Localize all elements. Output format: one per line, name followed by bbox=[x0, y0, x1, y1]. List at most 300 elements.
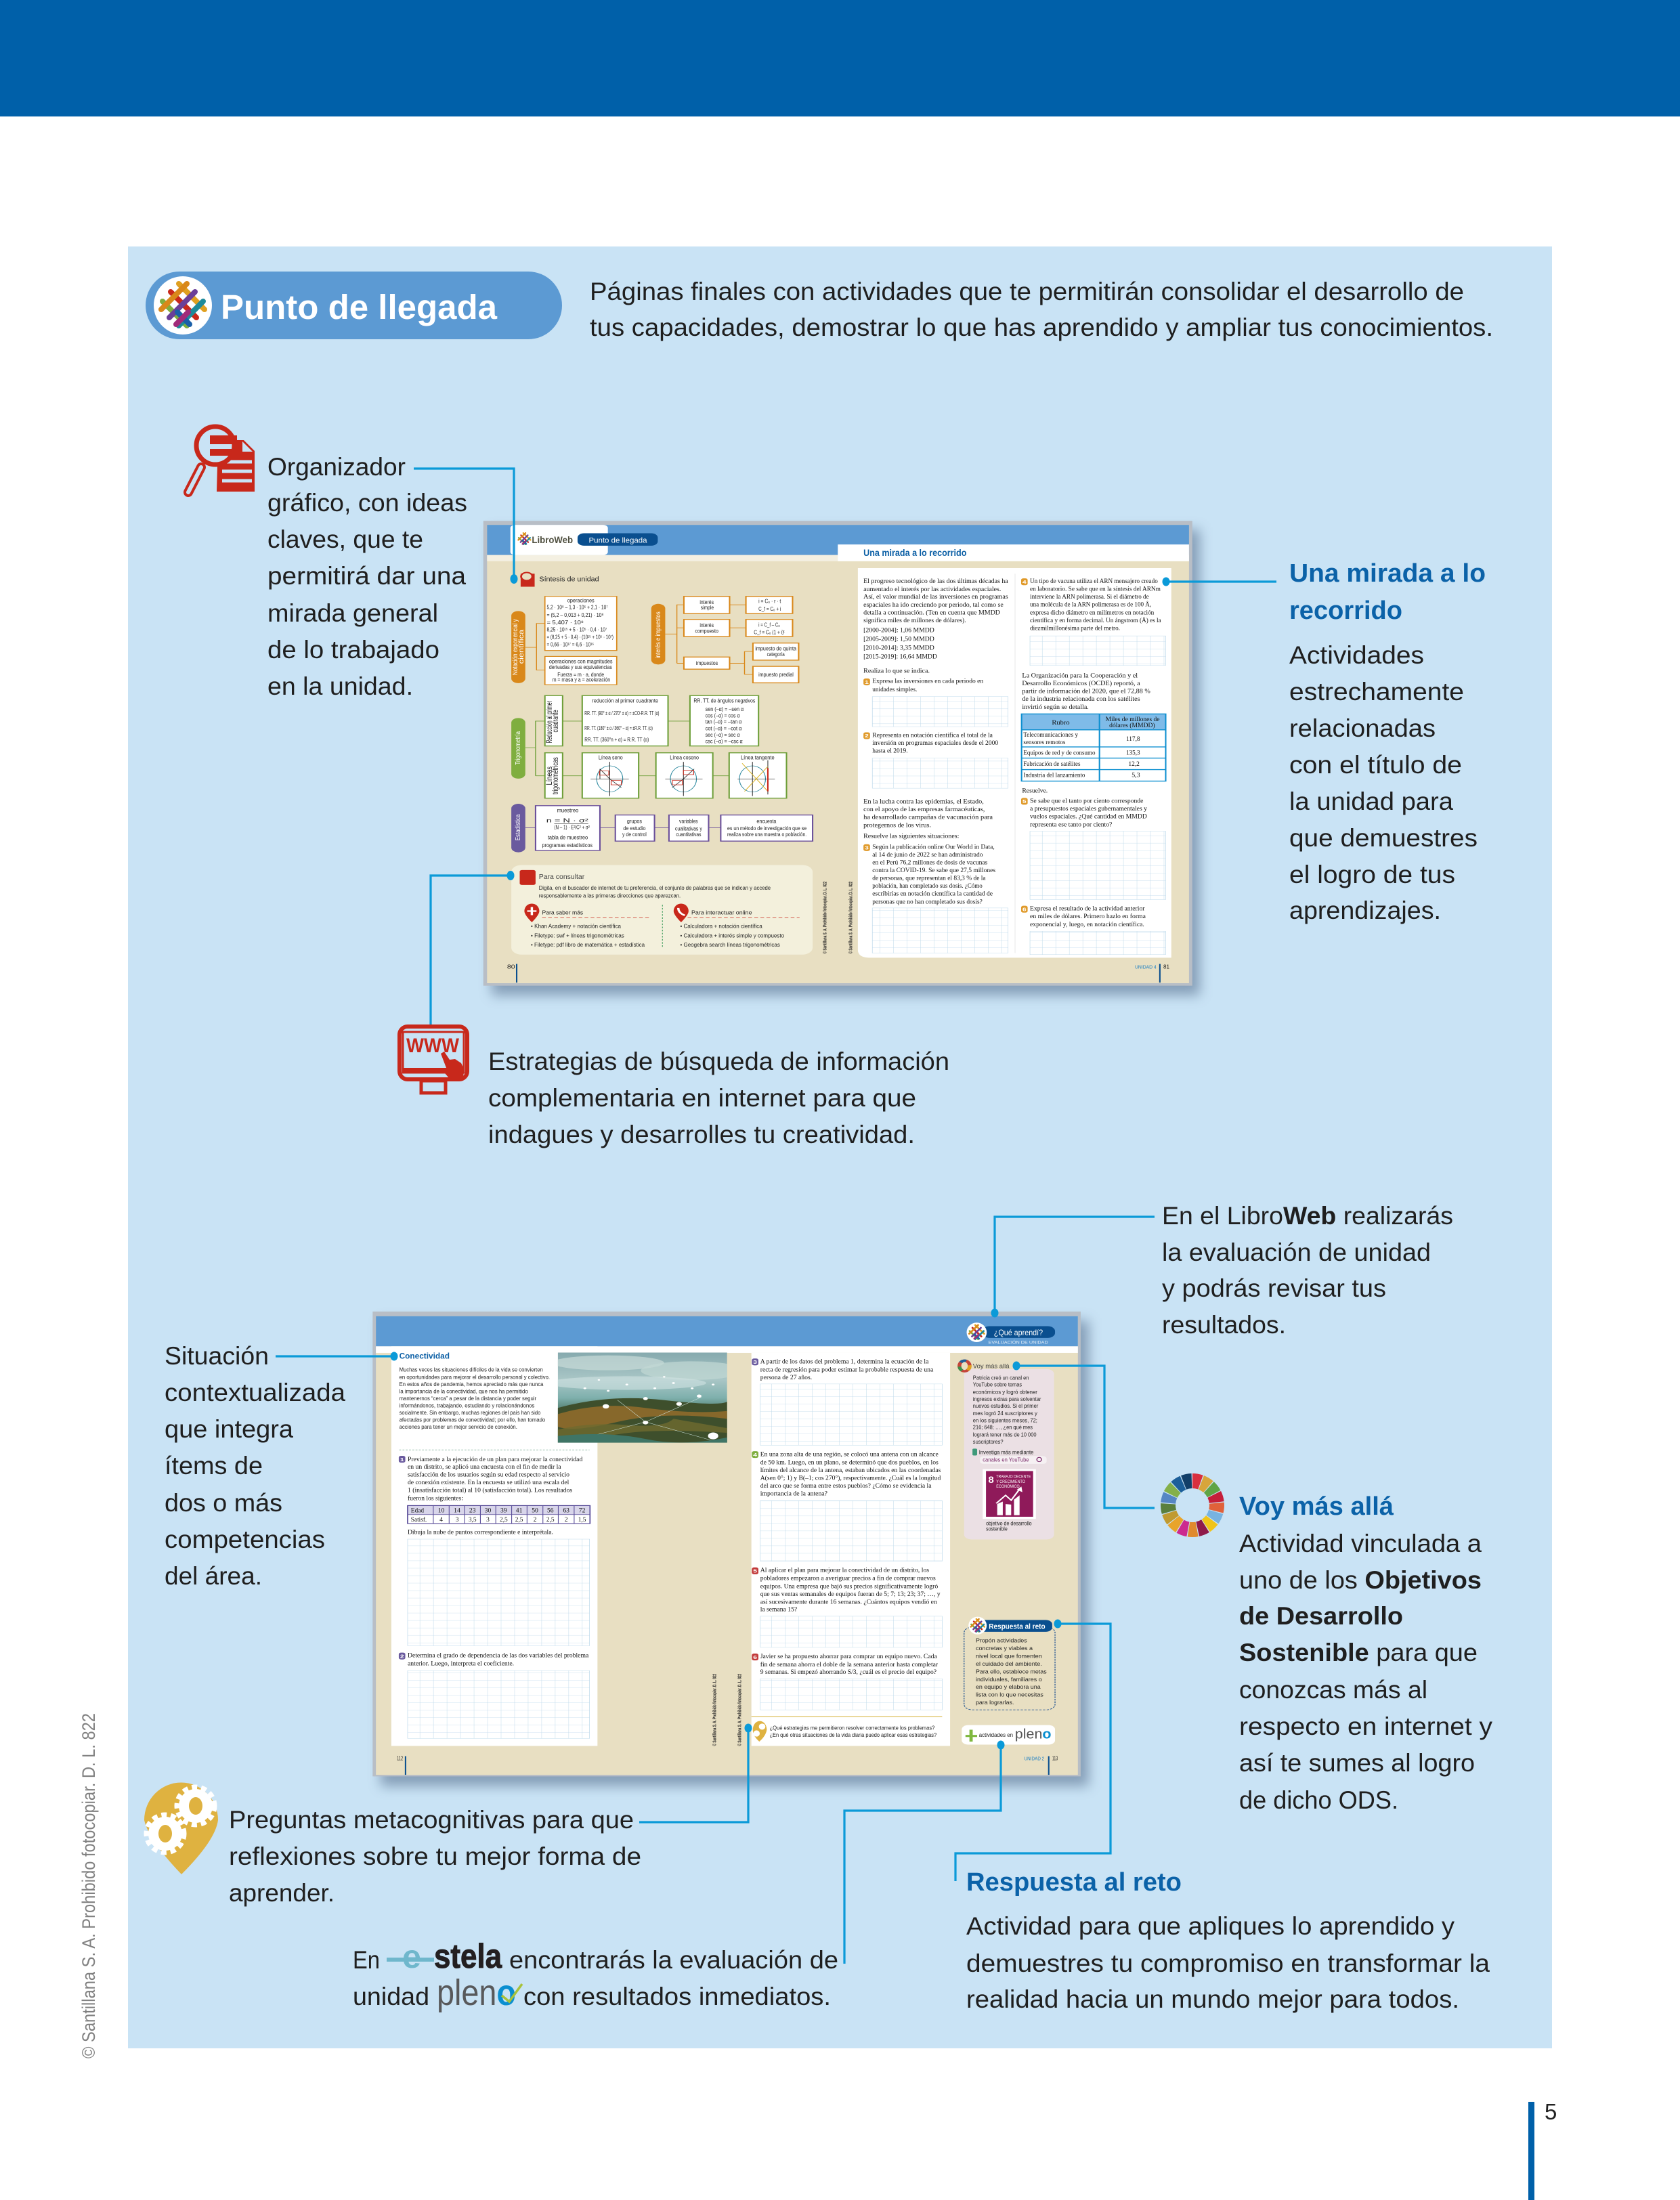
panel: spread Qué aprendí bbox=[372, 1312, 1081, 1776]
exercise 5: representa ese tanto por ciento? bbox=[1030, 821, 1112, 828]
exercise 6: Expresa el resultado de la actividad anterior bbox=[1030, 905, 1144, 912]
table: rubros: Fabricación de satélites bbox=[1023, 760, 1081, 767]
heading and text: voy más allá: así te sumes al logro bbox=[1239, 1749, 1475, 1777]
text: e-stela evaluación: con resultados inmediatos. bbox=[523, 1983, 831, 2010]
table: satisfacción por edad: 41 bbox=[516, 1507, 522, 1514]
organizer: notación exponencial: derivadas y sus equivalencias bbox=[549, 665, 612, 671]
exercise 3: de personas, que representan el 83,3 % de la bbox=[872, 874, 986, 882]
top banner bbox=[0, 0, 1680, 116]
panel: para consultar: • Calculadora + notación científica bbox=[680, 924, 762, 930]
right page number: UNIDAD 4 bbox=[1135, 964, 1157, 970]
exercise 5: la semana 15? bbox=[760, 1605, 797, 1613]
table: satisfacción por edad: 2,5 bbox=[515, 1515, 523, 1523]
exercise 1 with table bbox=[399, 1455, 590, 1646]
exercise 2: 2 bbox=[865, 733, 869, 739]
exercise 2 bbox=[863, 731, 1008, 788]
table: satisfacción por edad: 2,5 bbox=[546, 1515, 555, 1523]
organizer: trigonometría: RR. TT. (360°n + α) = R.R. TT (α) bbox=[584, 737, 649, 743]
panel: spread Una mirada a lo recorrido bbox=[483, 521, 1192, 986]
panel: section background bbox=[128, 246, 1552, 2048]
organizer: interés e impuestos: simple bbox=[701, 605, 714, 611]
copyright line: © Santillana S. A. Prohibido fotocopiar. D. L. 822 bbox=[712, 1673, 718, 1746]
heading and text: una mirada a lo recorrido: el logro de tus bbox=[1289, 861, 1455, 888]
organizer: estadística: de estudio bbox=[623, 826, 646, 832]
organizer: interés e impuestos: i = C₀ · r · t bbox=[758, 599, 781, 605]
text: conectividad: la importancia de la conectividad, que nos ha permitido bbox=[400, 1389, 528, 1395]
panel: respuesta al reto: nivel local que fomenten bbox=[976, 1654, 1042, 1660]
text: situación contextualizada: competencias bbox=[165, 1526, 325, 1553]
organizer: estadística: cuantitativas bbox=[676, 832, 701, 838]
panel: voy más allá: ingresos extras para solventar bbox=[973, 1397, 1041, 1402]
section title: Punto de llegada bbox=[221, 288, 498, 326]
text: preguntas metacognitivas bbox=[229, 1806, 641, 1907]
panel: spread Qué aprendí: 113 bbox=[1052, 1756, 1058, 1762]
panel: central exercises page bbox=[752, 1353, 950, 1746]
table: satisfacción por edad: 3 bbox=[456, 1515, 458, 1523]
exercise 6: fin de semana ahorra el doble de la semana anterior hasta completar bbox=[760, 1660, 938, 1668]
exercise 2: Representa en notación científica el total de la bbox=[872, 731, 993, 739]
organizer: estadística: (N – 1) · E²/C² + σ² bbox=[554, 825, 590, 831]
table: satisfacción por edad: Satisf. bbox=[411, 1515, 427, 1523]
text: OCDE: partir de información del 2020, que el 72,88 % bbox=[1022, 687, 1150, 695]
panel: voy más allá: 216; 648; …, ¿en qué mes bbox=[973, 1425, 1033, 1431]
heading: síntesis de unidad: Síntesis de unidad bbox=[539, 576, 599, 583]
text: conectividad: en oportunidades para mejorar el desarrollo personal y colectivo. bbox=[400, 1375, 550, 1381]
shadow: second spread bbox=[381, 1320, 1089, 1786]
organizer: trigonometría: Líneas bbox=[546, 767, 555, 785]
panel: voy más allá: mes logró 24 suscriptores y bbox=[973, 1411, 1037, 1417]
panel: respuesta al reto: concretas y viables a bbox=[976, 1646, 1033, 1652]
text: conectividad bbox=[400, 1367, 550, 1430]
panel: para consultar: • Geogebra search líneas trigonométricas bbox=[680, 943, 780, 948]
exercise 4: Un tipo de vacuna utiliza el ARN mensajero creado bbox=[1030, 577, 1158, 584]
exercise 1 with table: en un distrito, se aplicó una encuesta con el fin de medir la bbox=[408, 1463, 561, 1471]
exercise 6: exponencial y, luego, en notación científica. bbox=[1030, 920, 1144, 928]
organizer: notación exponencial: Fuerza = m · a, donde bbox=[557, 672, 605, 678]
organizer: trigonometría: Línea tangente bbox=[741, 755, 775, 761]
organizer: notación exponencial: científica bbox=[517, 630, 525, 664]
text: situación contextualizada: contextualizada bbox=[165, 1379, 345, 1406]
panel: voy más allá bbox=[960, 1360, 1054, 1539]
panel: respuesta al reto: el cuidado del ambiente. bbox=[976, 1662, 1042, 1667]
organizer: trigonometría: Reducción al primer bbox=[546, 701, 555, 743]
icon: magnifier and document bbox=[188, 427, 255, 492]
exercise 1 with table: Previamente a la ejecución de un plan para mejorar la conectividad bbox=[408, 1455, 582, 1463]
organizer: trigonometría: cot (–α) = –cot α bbox=[706, 726, 742, 732]
exercise 3: 3 bbox=[753, 1360, 757, 1365]
organizer: trigonometría: RR. TT. de ángulos negativos bbox=[693, 698, 755, 704]
organizer: interés e impuestos: i = C_f – C₀ bbox=[758, 622, 780, 628]
text: conectividad: acciones para tener un mejor servicio de conexión. bbox=[400, 1425, 517, 1430]
exercise 3: población, han completado sus dosis. ¿Cómo bbox=[872, 882, 983, 889]
panel: voy más allá: YouTube sobre temas bbox=[973, 1382, 1022, 1388]
connectors bbox=[276, 469, 1276, 1964]
table: rubros: 117,8 bbox=[1126, 735, 1140, 742]
panel: para consultar bbox=[511, 865, 813, 955]
ODS tile 8: Y CRECIMIENTO bbox=[996, 1479, 1025, 1484]
panel: voy más allá: en los siguientes meses, 72; bbox=[973, 1418, 1037, 1424]
table: satisfacción por edad: 56 bbox=[547, 1507, 554, 1514]
panel: voy más allá: nuevos estudios. Si el primer bbox=[973, 1404, 1039, 1410]
organizer: interés e impuestos: impuesto predial bbox=[758, 672, 794, 678]
heading and text: una mirada a lo recorrido: con el título de bbox=[1289, 751, 1462, 779]
exercise 3: A partir de los datos del problema 1, determina la ecuación de la bbox=[760, 1358, 929, 1365]
exercise 3: al 14 de junio de 2022 se han administrado bbox=[872, 850, 983, 858]
intro text: Páginas finales con actividades que te permitirán consolidar el desarrollo de bbox=[590, 278, 1464, 305]
organizer: trigonometría: Línea seno bbox=[599, 755, 623, 761]
text: estrategias de búsqueda bbox=[488, 1048, 949, 1148]
badge: actividades en pleno: pleno bbox=[1015, 1727, 1052, 1742]
panel: voy más allá: Voy más allá bbox=[973, 1363, 1010, 1370]
exercise 6: 6 bbox=[1022, 907, 1027, 912]
logo: e-stela bbox=[387, 1937, 502, 1975]
text: preguntas metacognitivas: Preguntas metacognitivas para que bbox=[229, 1806, 634, 1834]
text: epidemias: Resuelve las siguientes situaciones: bbox=[863, 832, 959, 840]
text: situación contextualizada: Situación bbox=[165, 1342, 269, 1370]
table: satisfacción por edad: 30 bbox=[485, 1507, 491, 1514]
copyright: © Santillana S. A. Prohibido fotocopiar. D. L. 822 bbox=[79, 1713, 99, 2058]
organizer: trigonometría: Trigonometría bbox=[514, 731, 522, 765]
text: reading intro: [2005-2009]: 1,50 MMDD bbox=[863, 635, 934, 643]
text: e-stela evaluación: En bbox=[353, 1946, 380, 1974]
organizer: estadística: cualitativas y bbox=[675, 826, 702, 832]
exercise 4: límites del alcance de la antena, estaban ubicados en las coordenadas bbox=[760, 1466, 941, 1473]
text: reading intro: detalla a continuación. (Ten en cuenta que MMDD bbox=[863, 609, 1000, 616]
text: reading intro: [2015-2019]: 16,64 MMDD bbox=[863, 653, 937, 660]
organizer: notación exponencial: = 5,407 · 10⁸ bbox=[546, 620, 584, 626]
ODS tile 8: TRABAJO DECENTE bbox=[996, 1474, 1031, 1479]
organizer: estadística: grupos bbox=[627, 819, 642, 825]
organizer: trigonometría: Línea coseno bbox=[670, 755, 699, 761]
text: organizador gráfico: Organizador bbox=[267, 453, 406, 481]
exercise 4: interviene la ARN polimerasa. Si el diámetro de bbox=[1030, 592, 1149, 600]
text: libroweb evaluación: la evaluación de unidad bbox=[1162, 1238, 1431, 1266]
text: organizador gráfico: en la unidad. bbox=[267, 672, 413, 700]
heading and text: voy más allá bbox=[1239, 1492, 1493, 1814]
panel: respuesta al reto: individuales, familiares o bbox=[976, 1677, 1042, 1683]
exercise 6: 6 bbox=[753, 1655, 757, 1660]
shadow: first spread bbox=[492, 530, 1200, 995]
organizer: estadística: y de control bbox=[622, 832, 647, 838]
text: conectividad: mantenernos “cerca” a pesar de la distancia y poder seguir bbox=[400, 1396, 537, 1402]
exercise 5: 5 bbox=[1022, 799, 1027, 804]
organizer: estadística bbox=[511, 804, 813, 853]
header badge: qué aprendí bbox=[967, 1322, 1055, 1345]
organizer: estadística: encuesta bbox=[756, 819, 777, 825]
table: rubros: sensores remotos bbox=[1023, 738, 1066, 746]
exercise 4: 4 bbox=[753, 1452, 757, 1457]
table: satisfacción por edad: 14 bbox=[454, 1507, 460, 1514]
organizer: estadística: variables bbox=[679, 819, 698, 825]
exercise 3: recta de regresión para poder estimar la probable respuesta de una bbox=[760, 1366, 934, 1373]
heading and text: una mirada a lo recorrido: Una mirada a lo bbox=[1289, 559, 1486, 588]
exercise 5: Al aplicar el plan para mejorar la conectividad de un distrito, los bbox=[760, 1566, 929, 1574]
organizer: interés e impuestos: compuesto bbox=[695, 628, 718, 634]
table: satisfacción por edad: 39 bbox=[500, 1507, 507, 1514]
table: rubros: 12,2 bbox=[1128, 760, 1140, 767]
panel: para consultar: • Filetype: pdf libro de matemática + estadística bbox=[531, 943, 645, 948]
text: e-stela evaluación: unidad bbox=[353, 1983, 429, 2010]
organizer: notación exponencial: = (8,25 + 5 · 0,4) · (10¹⁵ + 10⁵ · 10⁷) bbox=[546, 634, 613, 641]
organizer: trigonometría bbox=[511, 695, 786, 798]
text: estrategias de búsqueda: indagues y desarrolles tu creatividad. bbox=[488, 1121, 915, 1148]
text: preguntas metacognitivas: reflexiones sobre tu mejor forma de bbox=[229, 1842, 641, 1870]
table: rubros: 5,3 bbox=[1132, 771, 1140, 779]
organizer: estadística: realiza sobre una muestra o población. bbox=[727, 832, 806, 838]
image: connected landscape bbox=[558, 1353, 727, 1443]
organizer: notación exponencial: Notación exponencial y bbox=[511, 619, 519, 675]
exercise 2 bbox=[399, 1652, 590, 1738]
organizer: interés e impuestos bbox=[651, 597, 798, 683]
table: rubros: 135,3 bbox=[1126, 749, 1140, 756]
panel: voy más allá: suscriptores? bbox=[973, 1440, 1004, 1445]
table: satisfacción por edad bbox=[408, 1505, 590, 1524]
panel: respuesta al reto: lista con lo que necesitas bbox=[976, 1692, 1043, 1698]
organizer: estadística: n = N · σ² bbox=[546, 818, 589, 824]
exercise 2: inversión en programas espaciales desde el 2000 bbox=[872, 739, 998, 746]
organizer: estadística: tabla de muestreo bbox=[548, 835, 588, 841]
panel: voy más allá: económicos y logró obtener bbox=[973, 1389, 1037, 1396]
exercise 5: Resuelve. bbox=[1022, 787, 1048, 794]
panel: left exercises page bbox=[391, 1346, 597, 1746]
exercise 1 with table: fueron los siguientes: bbox=[408, 1494, 463, 1502]
exercise 3: escribirías en notación científica la cantidad de bbox=[872, 890, 993, 897]
table: rubros: Miles de millones de bbox=[1106, 715, 1160, 722]
table: rubros bbox=[1022, 714, 1165, 781]
panel: para consultar: Para interactuar online bbox=[691, 910, 752, 916]
text: OCDE: La Organización para la Cooperación y el bbox=[1022, 672, 1138, 679]
heading: conectividad: Conectividad bbox=[400, 1352, 450, 1361]
metacognitive questions: ¿Qué estrategias me permitieron resolver correctamente los problemas? bbox=[770, 1725, 935, 1731]
exercise 1: Expresa las inversiones en cada periodo en bbox=[872, 677, 983, 685]
panel: voy más allá: canales en YouTube bbox=[983, 1457, 1029, 1463]
exercise 5: así sucesivamente durante 16 semanas. ¿Cuántos equipos vendió en bbox=[760, 1598, 937, 1605]
panel: respuesta al reto: en equipo y elabora una bbox=[976, 1685, 1041, 1690]
panel: respuesta al reto bbox=[964, 1617, 1055, 1710]
page number bbox=[1528, 2099, 1557, 2200]
heading and text: una mirada a lo recorrido: recorrido bbox=[1289, 597, 1402, 625]
exercise 3 bbox=[863, 843, 1008, 953]
text: epidemias: ha desarrollado campañas de vacunación para bbox=[863, 813, 993, 821]
organizer: interés e impuestos: interés e impuestos bbox=[653, 611, 662, 658]
organizer: notación exponencial: operaciones bbox=[567, 598, 595, 604]
text: estrategias de búsqueda: Estrategias de búsqueda de información bbox=[488, 1048, 949, 1075]
exercise 4: expresa dicho diámetro en milímetros en notación bbox=[1030, 609, 1154, 616]
text: organizador gráfico: gráfico, con ideas bbox=[267, 489, 467, 517]
heading and text: respuesta al reto: Actividad para que apliques lo aprendido y bbox=[966, 1912, 1455, 1940]
organizer: notación exponencial: operaciones con magnitudes bbox=[549, 659, 613, 665]
exercise 5: 5 bbox=[753, 1568, 757, 1574]
panel: voy más allá: sostenible bbox=[986, 1526, 1008, 1532]
exercise 5: pobladores empezaron a averiguar precios a fin de comprar nuevos bbox=[760, 1574, 936, 1582]
panel: respuesta al reto: Propón actividades bbox=[976, 1638, 1027, 1644]
table: satisfacción por edad: 50 bbox=[532, 1507, 538, 1514]
organizer: notación exponencial bbox=[511, 597, 617, 685]
text: situación contextualizada bbox=[165, 1342, 345, 1590]
exercise 1 bbox=[863, 677, 1008, 727]
panel: para consultar: • Calculadora + interés simple y compuesto bbox=[680, 933, 784, 939]
table: satisfacción por edad: 10 bbox=[438, 1507, 444, 1514]
exercise 1 with table: 1 (insatisfacción total) al 10 (satisfacción total). Los resultados bbox=[408, 1486, 572, 1494]
exercise 1 with table: 1 bbox=[400, 1457, 404, 1462]
right page number bbox=[1135, 964, 1169, 983]
left page number: 80 bbox=[507, 964, 515, 970]
organizer: interés e impuestos: interés bbox=[699, 600, 714, 605]
icon: gears pin bbox=[144, 1782, 218, 1874]
exercise 5: que sus ventas semanales de equipos fueran de 5; 7; 13; 23; 37; …, y bbox=[760, 1590, 941, 1597]
table: rubros: Industria del lanzamiento bbox=[1023, 771, 1085, 779]
heading and text: respuesta al reto: demuestres tu compromiso en transformar la bbox=[966, 1949, 1490, 1977]
left page number bbox=[397, 1756, 406, 1775]
text: e-stela evaluación bbox=[353, 1937, 838, 2013]
logo: e-stela: e bbox=[402, 1939, 421, 1975]
exercise 3: personas que no han completado sus dosis? bbox=[872, 898, 983, 905]
exercise 4: del arco que se forma entre estos pueblos? ¿Cómo se evidencia la bbox=[760, 1482, 932, 1489]
table: satisfacción por edad: 23 bbox=[469, 1507, 476, 1514]
icon: www monitor: WWW bbox=[406, 1035, 460, 1057]
table: rubros: Telecomunicaciones y bbox=[1023, 731, 1079, 738]
metacognitive questions bbox=[753, 1721, 936, 1742]
organizer: trigonometría: cos (–α) = cos α bbox=[706, 713, 740, 719]
panel: para consultar: Digita, en el buscador de internet de tu preferencia, el conjunto de palabras que se indican y accede bbox=[539, 886, 771, 891]
organizer: trigonometría: trigonométricas bbox=[552, 757, 561, 794]
table: satisfacción por edad: Edad bbox=[411, 1507, 424, 1514]
table: satisfacción por edad: 63 bbox=[563, 1507, 569, 1514]
table: satisfacción por edad: 3 bbox=[486, 1515, 490, 1523]
ODS tile 8 bbox=[983, 1469, 1036, 1519]
heading and text: respuesta al reto bbox=[966, 1868, 1490, 2013]
organizer: interés e impuestos: C_f = C₀ (1 + i)ᵗ bbox=[754, 630, 785, 636]
table: satisfacción por edad: 2,5 bbox=[500, 1515, 508, 1523]
table: satisfacción por edad: 2 bbox=[534, 1515, 536, 1523]
libroweb tab: Punto de llegada bbox=[588, 536, 647, 544]
heading and text: una mirada a lo recorrido bbox=[1289, 559, 1486, 924]
text: conectividad: afectadas por problemas de conectividad; por ello, han tomado bbox=[400, 1417, 546, 1423]
organizer: trigonometría: sen (–α) = –sen α bbox=[706, 707, 744, 713]
text: conectividad: En estos años de pandemia, hemos apreciado más que nunca bbox=[400, 1382, 544, 1387]
table: rubros: Rubro bbox=[1052, 718, 1070, 726]
organizer: interés e impuestos: impuestos bbox=[696, 661, 718, 667]
heading and text: voy más allá: Sostenible para que bbox=[1239, 1639, 1478, 1666]
organizer: notación exponencial: m = masa y a = aceleración bbox=[553, 677, 610, 683]
spread title: Una mirada a lo recorrido bbox=[863, 548, 967, 558]
heading and text: voy más allá: uno de los Objetivos bbox=[1239, 1566, 1482, 1594]
text: epidemias bbox=[863, 798, 993, 840]
exercise 4 bbox=[752, 1450, 942, 1561]
table: satisfacción por edad: 4 bbox=[439, 1515, 443, 1523]
text: estrategias de búsqueda: complementaria en internet para que bbox=[488, 1084, 916, 1112]
exercise 2: hasta el 2019. bbox=[872, 747, 908, 754]
organizer: trigonometría: sec (–α) = sec α bbox=[706, 733, 740, 738]
panel: para consultar: responsablemente a las primeras direcciones que aparezcan. bbox=[539, 893, 681, 899]
exercise 4: A(sen 0°; 1) y B(–1; cos 270°), respectivamente. ¿Cuál es la longitud bbox=[760, 1474, 941, 1482]
intro text bbox=[590, 278, 1493, 341]
organizer: trigonometría: csc (–α) = –csc α bbox=[706, 739, 743, 745]
panel: voy más allá: objetivo de desarrollo bbox=[986, 1521, 1032, 1527]
exercise 1 with table: satisfacción de los usuarios según su edad respecto al servicio bbox=[408, 1471, 569, 1478]
exercise 5: a presupuestos espaciales gubernamentales y bbox=[1030, 805, 1148, 813]
exercise 3: Según la publicación online Our World in Data, bbox=[872, 843, 995, 850]
header badge: qué aprendí: ¿Qué aprendí? bbox=[994, 1329, 1043, 1337]
panel: voy más allá: Investiga más mediante bbox=[979, 1450, 1034, 1456]
badge: actividades en pleno bbox=[962, 1725, 1055, 1745]
exercise 2: Determina el grado de dependencia de las dos variables del problema bbox=[408, 1652, 589, 1659]
text: conectividad: informándonos, trabajando, estudiando y relacionándonos bbox=[400, 1403, 534, 1409]
left page number: 112 bbox=[397, 1756, 403, 1762]
exercise 5: equipos. Una empresa que bajó sus precios significativamente logró bbox=[760, 1582, 938, 1590]
text: OCDE: Desarrollo Económicos (OCDE) reportó, a bbox=[1022, 679, 1140, 687]
logo: pleno: pleno bbox=[437, 1972, 516, 2013]
exercise 4: diezmilmillonésima parte del metro. bbox=[1030, 624, 1120, 632]
exercise 4 bbox=[1021, 577, 1165, 666]
icon: www monitor bbox=[400, 1027, 467, 1093]
exercise 1 with table: de conexión existente. En la encuesta se utilizó una escala del bbox=[408, 1479, 569, 1486]
section header pill bbox=[146, 272, 562, 339]
text: organizador gráfico bbox=[267, 453, 467, 700]
organizer: trigonometría: RR. TT. (90° ± α / 270° ± α) = ±CO-R.R. TT (α) bbox=[584, 711, 659, 717]
table: satisfacción por edad: 72 bbox=[579, 1507, 585, 1514]
heading and text: una mirada a lo recorrido: que demuestres bbox=[1289, 824, 1478, 852]
exercise 6: 9 semanas. Si empezó ahorrando S/3, ¿cuál es el precio del equipo? bbox=[760, 1668, 936, 1675]
exercise 2: 2 bbox=[400, 1654, 404, 1659]
exercise 6: Javier se ha propuesto ahorrar para comprar un equipo nuevo. Cada bbox=[760, 1652, 937, 1660]
table: rubros: Equipos de red y de consumo bbox=[1023, 749, 1095, 756]
table: satisfacción por edad: 1,5 bbox=[578, 1515, 586, 1523]
text: organizador gráfico: claves, que te bbox=[267, 525, 423, 553]
heading: síntesis de unidad bbox=[521, 572, 599, 587]
text: OCDE: de la industria relacionada con los satélites bbox=[1022, 695, 1140, 702]
text: conectividad: socialmente. Sin embargo, muchas regiones del país han sido bbox=[400, 1410, 541, 1416]
organizer: notación exponencial: = (5,2 – 0,013 + 0,21) · 10⁸ bbox=[546, 613, 603, 618]
badge: actividades en pleno: actividades en bbox=[979, 1733, 1013, 1738]
text: situación contextualizada: que integra bbox=[165, 1415, 293, 1443]
organizer: interés e impuestos: impuesto de quinta bbox=[755, 646, 796, 652]
organizer: trigonometría: tan (–α) = –tan α bbox=[706, 719, 742, 725]
exercise 5 bbox=[1021, 787, 1165, 899]
heading and text: una mirada a lo recorrido: Actividades bbox=[1289, 641, 1424, 669]
exercise 3: 3 bbox=[865, 845, 869, 850]
exercise 3 bbox=[752, 1358, 942, 1445]
copyright line: © Santillana S. A. Prohibido fotocopiar. D. L. 822 bbox=[848, 881, 854, 953]
text: libroweb evaluación: resultados. bbox=[1162, 1311, 1286, 1339]
exercise 5: vuelos espaciales. ¿Qué cantidad en MMDD bbox=[1030, 813, 1147, 820]
heading and text: voy más allá: Actividad vinculada a bbox=[1239, 1530, 1482, 1557]
exercise 4: científica y en forma decimal. Un ángstrom (Å) es la bbox=[1030, 616, 1161, 624]
ODS tile 8: ECONÓMICO bbox=[996, 1484, 1020, 1489]
exercise 1 with table: Dibuja la nube de puntos correspondiente e interprétala. bbox=[408, 1528, 553, 1536]
panel: exercises page bbox=[858, 568, 1171, 957]
text: organizador gráfico: de lo trabajado bbox=[267, 636, 439, 664]
right page number: UNIDAD 2 bbox=[1025, 1756, 1044, 1761]
text: reading intro: Así, el valor mundial de las inversiones en programas bbox=[863, 592, 1008, 600]
exercise 4: de 50 km. Luego, en un plano, se determinó que dos pueblos, en los bbox=[760, 1459, 939, 1466]
heading and text: una mirada a lo recorrido: estrechamente bbox=[1289, 678, 1464, 706]
exercise 4: En una zona alta de una región, se colocó una antena con un alcance bbox=[760, 1450, 939, 1458]
panel: voy más allá: Patricia creó un canal en bbox=[973, 1375, 1029, 1381]
metacognitive questions: ¿En qué otras situaciones de la vida diaria puedo aplicar esas estrategias? bbox=[770, 1733, 936, 1738]
organizer: trigonometría: cuadrante bbox=[552, 710, 561, 732]
panel: respuesta al reto: Para ello, establece metas bbox=[976, 1669, 1047, 1675]
exercise 3: persona de 27 años. bbox=[760, 1373, 812, 1381]
table: satisfacción por edad: 3,5 bbox=[469, 1515, 477, 1523]
organizer: estadística: muestreo bbox=[557, 808, 579, 814]
organizer: estadística: programas estadísticos bbox=[542, 843, 593, 848]
heading and text: voy más allá: conozcas más al bbox=[1239, 1676, 1427, 1704]
header badge: qué aprendí: EVALUACIÓN DE UNIDAD bbox=[989, 1339, 1048, 1345]
text: organizador gráfico: permitirá dar una bbox=[267, 562, 466, 590]
text: organizador gráfico: mirada general bbox=[267, 599, 438, 627]
text: reading intro: espaciales ha ido creciendo por periodo, tal como se bbox=[863, 601, 1004, 608]
